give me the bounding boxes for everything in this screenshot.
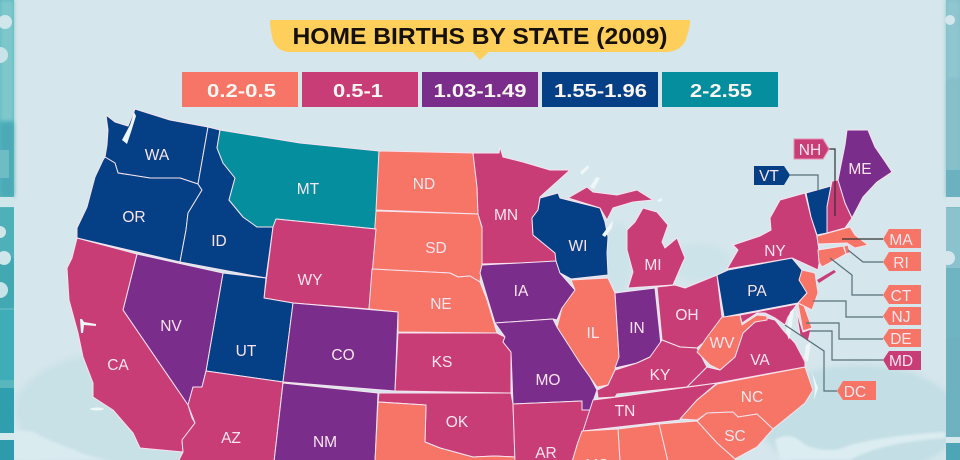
state: OK [378,393,515,457]
water details: bays and islands [80,112,818,410]
tag: MD: MD [889,353,913,370]
state: SC: SC [724,428,746,445]
state: MN [473,147,570,264]
state: NJ [798,270,818,310]
state: NV [123,254,223,405]
state: NH [827,180,852,233]
state: CA [67,238,195,452]
state: NE [369,269,497,333]
state: WA [105,109,208,184]
state: OR: OR [122,209,146,226]
tag: DC [837,381,876,401]
tag: CT: CT [891,288,912,305]
state: KS: KS [432,354,452,371]
state: NV: NV [160,318,182,335]
state: VT [806,186,831,235]
legend: 2-2.55 [662,72,778,107]
legend: 1.55-1.96: 1.55-1.96 [554,81,647,101]
tag: MD [883,351,921,370]
state: DE [798,303,812,331]
tag: MA [883,229,921,249]
tag: NH: NH [799,142,821,159]
legend: 0.5-1 [302,72,418,107]
state: WY [264,219,376,309]
state: KS [395,333,511,393]
tag: MA: MA [889,232,913,249]
state: NM: NM [313,434,337,451]
state: GA [659,421,737,460]
state: NM [274,383,378,460]
state: ME: ME [848,161,872,178]
state: OK: OK [446,414,469,431]
state: MD [740,304,811,342]
state: MT: MT [297,181,320,198]
state: NC: NC [741,389,763,406]
title banner: HOME BIRTHS BY STATE (2009) [292,23,668,49]
state: UT: UT [236,343,257,360]
state: SC [697,412,773,459]
state: NY: NY [764,243,786,260]
state: PA: PA [747,283,767,300]
state: NY Long Island [817,270,836,283]
state: WI [532,193,608,279]
tag: NJ: NJ [892,309,910,326]
state: OR [77,157,202,262]
tag: DE [883,329,921,348]
state: VA: VA [750,352,770,369]
legend: 2-2.55: 2-2.55 [690,81,752,101]
state: IA [480,261,575,323]
state: NC [680,367,813,429]
state: MO [495,319,597,410]
state: CO [283,303,398,391]
leader lines [785,149,883,391]
legend: 0.5-1: 0.5-1 [333,81,383,101]
title banner [270,20,690,60]
state: RI [844,245,850,254]
state: MO: MO [536,372,560,389]
state: IL [557,278,619,387]
state: OH [657,275,722,348]
state: IN [615,288,661,368]
state: WV [697,315,767,370]
legend: 0.2-0.5 [182,72,298,107]
state: NE: NE [430,296,452,313]
state: IA: IA [514,283,529,300]
legend: 1.03-1.49: 1.03-1.49 [434,81,526,101]
state: NY [727,193,820,270]
state: ID: ID [211,233,227,250]
state: AL [618,424,668,460]
tag: NH [794,139,829,159]
state: MI: MI [644,257,662,274]
legend: 1.03-1.49 [422,72,538,107]
state: ND: ND [413,176,435,193]
state: MS [572,429,620,460]
state: AR [513,401,590,460]
state: ME [838,130,892,218]
state: VA [687,318,805,387]
tag: NJ [883,307,921,326]
state: UT [206,273,293,382]
state: CO: CO [331,347,355,364]
legend [182,72,778,107]
legend: 1.55-1.96 [542,72,658,107]
state: MI [627,208,685,288]
legend: 0.2-0.5: 0.2-0.5 [207,81,276,101]
tag: DC: DC [844,384,866,401]
tag: VT [754,166,790,185]
state: TX [375,402,515,460]
left watercolor border [0,0,14,460]
state: OH: OH [675,307,699,324]
state: AZ [178,371,283,460]
state: KY [597,340,707,398]
state: WV: WV [710,335,735,352]
state: MA [817,227,868,248]
state: SD [372,211,482,282]
tag: DE: DE [890,331,912,348]
state: TN [583,383,717,431]
state: AZ: AZ [221,430,241,447]
tag: RI [883,252,921,272]
state: MN: MN [494,207,518,224]
tag: CT [883,285,921,305]
state: KY: KY [650,367,670,384]
state: ND [376,151,478,214]
state: PA [717,258,807,317]
state: CT [818,246,846,267]
tag: RI: RI [893,255,909,272]
state: ID [180,127,273,278]
state: WA: WA [145,147,170,164]
tag: VT: VT [759,168,779,185]
state: MI upper [568,187,653,220]
state: IL: IL [587,325,600,342]
state: WY: WY [298,272,322,289]
right watercolor border [941,0,960,460]
state tags [754,139,921,401]
state: SD: SD [425,240,447,257]
state: MT [217,130,379,229]
state: IN: IN [629,320,645,337]
map of US states [67,109,892,460]
state: CA: CA [107,357,129,374]
state: TN: TN [615,403,635,420]
state: WI: WI [569,238,587,255]
